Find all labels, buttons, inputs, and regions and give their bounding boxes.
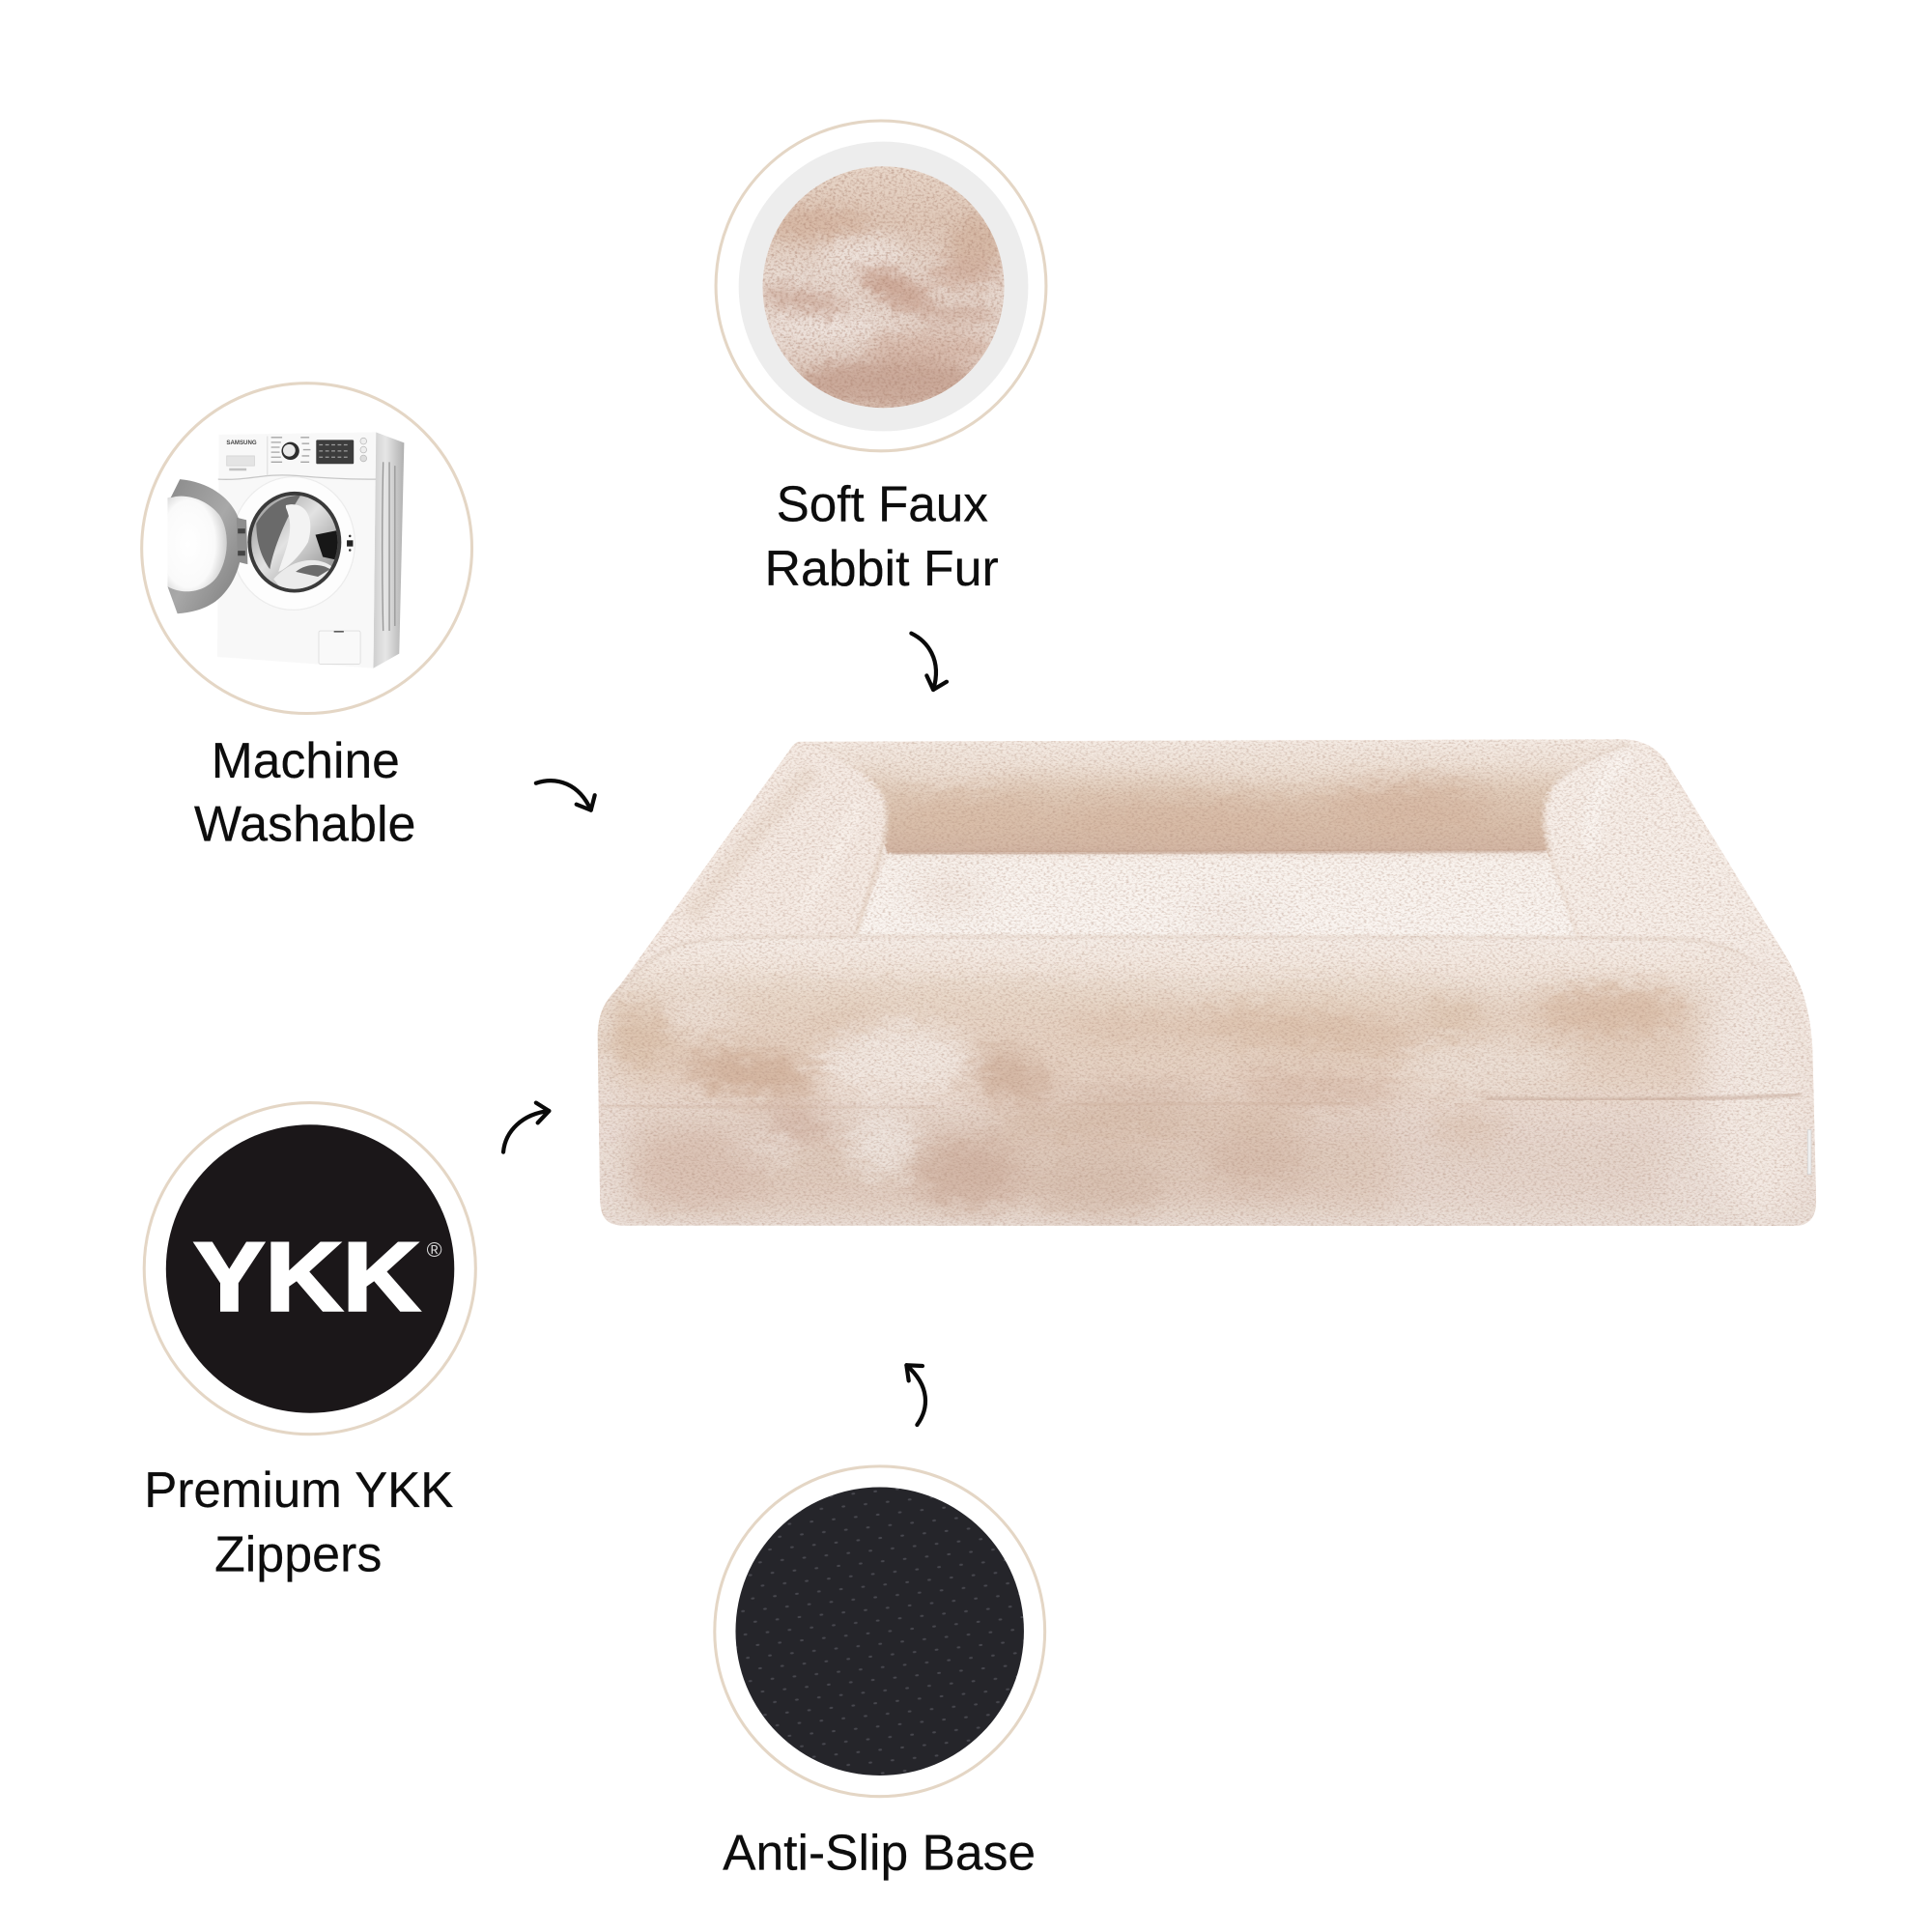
panel: machine washable [142,384,472,714]
door hinge [237,518,247,564]
YKK wordmark: ® [427,1237,442,1262]
label: machine washable: Machine [212,733,400,789]
buttons [360,438,367,444]
arrow: zippers to bed [503,1103,549,1152]
open door [167,479,242,613]
floor fur shading [922,876,976,912]
lower panel mottling [760,1110,829,1140]
upper tan band [740,969,1144,997]
dial [281,442,299,460]
door latch [347,540,353,547]
filter cover [319,631,360,665]
anti-slip material swatch [735,1488,1024,1776]
display [316,440,354,464]
sewn-on tag [1807,1130,1811,1175]
label: premium YKK zippers: Premium YKK [144,1463,453,1519]
light right end of bed [1702,961,1810,1202]
circle frame: washer [142,384,472,714]
panel: soft faux rabbit fur [716,121,1046,451]
label: anti-slip base: Anti-Slip Base [723,1826,1036,1882]
icon: washing machine [167,432,404,668]
infographic: bed features [140,120,1816,1881]
washer front [217,432,376,668]
label: soft faux rabbit fur [764,477,999,597]
YKK wordmark: YKK [193,1224,420,1332]
panel: premium YKK zippers [144,1103,475,1435]
well shadow [892,850,1545,854]
fur swatch photo [757,160,1010,412]
floor cushion [853,850,1583,941]
seam [600,1105,936,1108]
right bolster [1540,753,1611,856]
label: machine washable [194,733,415,853]
back bolster [845,761,1578,856]
left bolster [822,757,891,844]
arrow: fur to bed [911,634,947,690]
arrow: washable to bed [536,781,595,810]
grey halo [739,142,1028,431]
front bolster top edge [607,934,1744,1004]
brand name: SAMSUNG [226,440,257,446]
detergent drawer [227,456,254,466]
front bolster [589,936,1824,1235]
overall tan and pink masses [622,1001,1707,1212]
drum [247,492,341,593]
fur grain [591,734,1824,1233]
label: soft faux rabbit fur: Soft Faux [777,477,988,533]
label: premium YKK zippers [144,1463,453,1582]
circle frame: fur swatch [716,121,1046,451]
bottom shadow [1602,1224,1725,1226]
front fur mottling [607,982,1686,1215]
product photo: plush bed [589,734,1824,1235]
label: soft faux rabbit fur: Rabbit Fur [764,541,999,597]
label: machine washable: Washable [194,797,415,853]
bed base shape [603,742,1812,1061]
washer side panel [373,432,404,668]
panel: anti-slip base [715,1466,1045,1797]
circle frame: base [715,1466,1045,1797]
logo disc [166,1124,454,1413]
circle frame: YKK [144,1103,475,1435]
door bezel [232,477,355,610]
label: premium YKK zippers: Zippers [214,1526,382,1582]
arrow: base to bed [906,1365,925,1425]
